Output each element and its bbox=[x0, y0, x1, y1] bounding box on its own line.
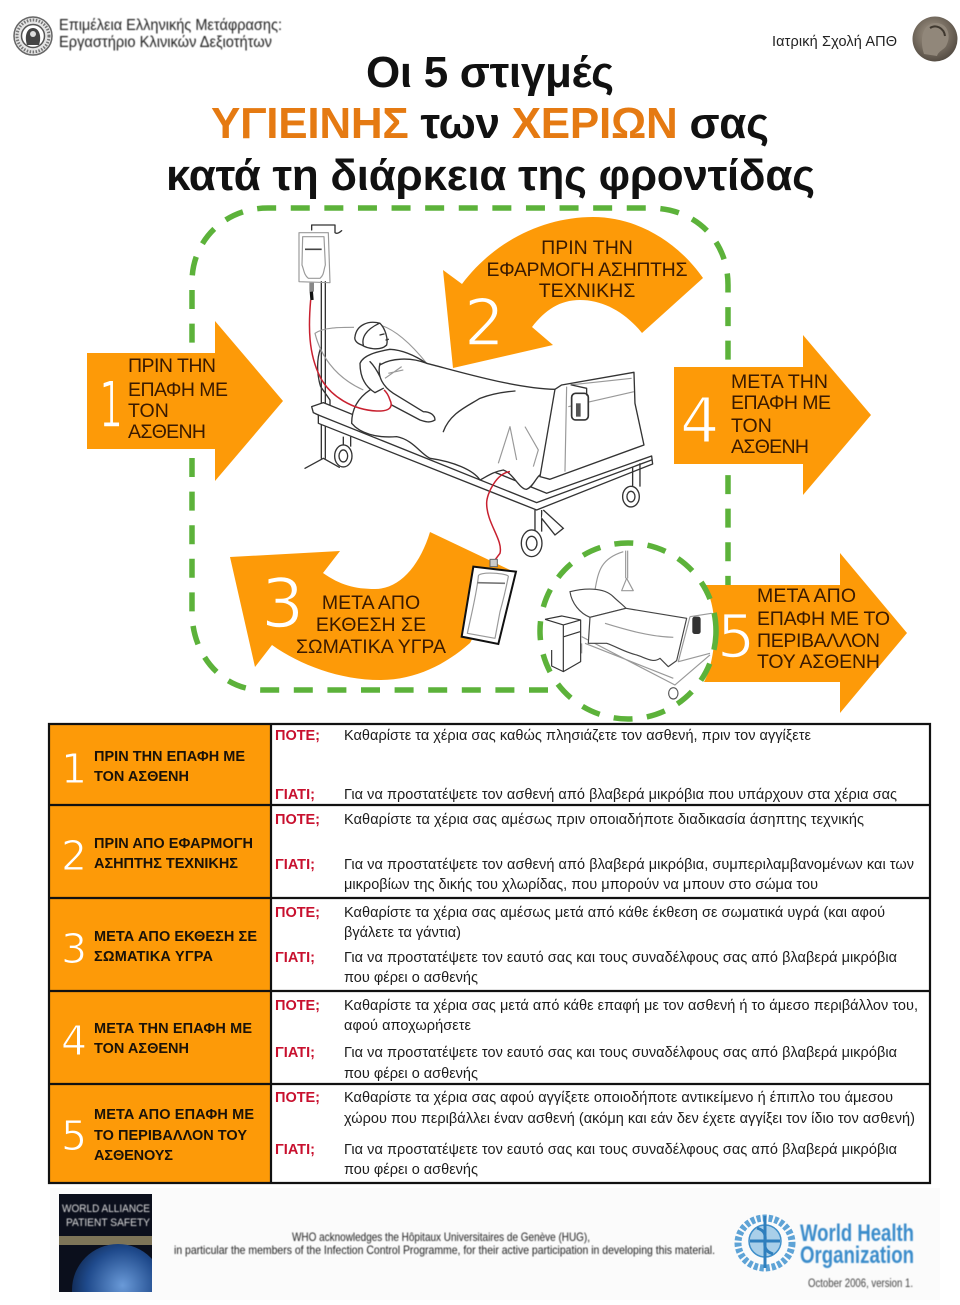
row 5: Καθαρίστε τα χέρια σας αφού αγγίξετε οποιοδήποτε αντικείμενο ή έπιπλο του άμεσου bbox=[344, 1090, 893, 1106]
row 2: Καθαρίστε τα χέρια σας αμέσως πριν οποιαδήποτε διαδικασία άσηπτης τεχνικής bbox=[344, 812, 864, 828]
row 3: ΜΕΤΑ ΑΠΟ ΕΚΘΕΣΗ ΣΕ bbox=[94, 929, 257, 945]
book cover: World Alliance for Patient Safety: PATIENT SAFETY bbox=[66, 1217, 151, 1229]
foot board bbox=[540, 372, 644, 479]
bed sheet bbox=[352, 363, 555, 489]
row 5: ΑΣΘΕΝΟΥΣ bbox=[94, 1148, 173, 1164]
row 1: ΠΡΙΝ ΤΗΝ ΕΠΑΦΗ ΜΕ bbox=[94, 749, 245, 765]
acknowledgement: WHO acknowledges the Hôpitaux Universitaires de Genève (HUG), bbox=[292, 1230, 590, 1244]
row 5: 5 bbox=[61, 1112, 87, 1160]
pillow bbox=[315, 325, 427, 390]
gel dispenser bbox=[572, 385, 588, 420]
mattress and sheet bbox=[588, 608, 687, 667]
arrow 4: ΤΟΝ bbox=[731, 415, 772, 437]
arrow 3: ΜΕΤΑ ΑΠΟ bbox=[322, 592, 420, 614]
row 5: που φέρει ο ασθενής bbox=[344, 1162, 478, 1178]
header: translation credit bbox=[14, 17, 282, 55]
row 5: ΤΟ ΠΕΡΙΒΑΛΛΟΝ ΤΟΥ bbox=[94, 1128, 247, 1144]
sheet folds bbox=[385, 367, 538, 467]
title: ΥΓΙΕΙΝΗΣ των ΧΕΡΙΩΝ σας bbox=[211, 99, 769, 148]
icon: university seal bbox=[14, 17, 52, 55]
table lines bbox=[49, 724, 930, 1183]
row 4: αφού αποχωρήσετε bbox=[344, 1018, 472, 1034]
title: κατά τη διάρκεια της φροντίδας bbox=[166, 151, 815, 200]
row 1: 1 bbox=[61, 745, 87, 793]
row 4 bbox=[61, 998, 918, 1082]
WHO wordmark: World Health bbox=[800, 1220, 914, 1247]
dashed green patient zone bbox=[192, 208, 728, 690]
book cover: World Alliance for Patient Safety: WORLD ALLIANCE bbox=[62, 1203, 150, 1215]
arrow 5: ΤΟΥ ΑΣΘΕΝΗ bbox=[757, 651, 880, 673]
dashed circle: patient surroundings bbox=[540, 543, 716, 719]
row 3: 3 bbox=[61, 925, 87, 973]
row 4: ΜΕΤΑ ΤΗΝ ΕΠΑΦΗ ΜΕ bbox=[94, 1021, 252, 1037]
foot board details bbox=[565, 378, 634, 472]
footer backdrop bbox=[50, 1188, 940, 1300]
IV bag bbox=[299, 233, 330, 300]
credit text bbox=[59, 17, 282, 51]
row 2: Για να προστατέψετε τον ασθενή από βλαβερά μικρόβια, συμπεριλαμβανομένων και των bbox=[344, 857, 914, 873]
row label backgrounds bbox=[49, 724, 271, 1183]
WHO wordmark: Organization bbox=[800, 1242, 914, 1269]
arrow 5: ΠΕΡΙΒΑΛΛΟΝ bbox=[757, 630, 880, 652]
arrow 1: ΠΡΙΝ ΤΗΝ bbox=[128, 355, 216, 377]
arrow 3 bbox=[230, 532, 510, 680]
row 2: ΠΡΙΝ ΑΠΟ ΕΦΑΡΜΟΓΗ bbox=[94, 836, 253, 852]
row 4: που φέρει ο ασθενής bbox=[344, 1066, 478, 1082]
row 4: Καθαρίστε τα χέρια σας μετά από κάθε επαφή με τον ασθενή ή το άμεσο περιβάλλον του, bbox=[344, 998, 918, 1014]
illustration: urine bag bbox=[462, 559, 516, 644]
row 4: Για να προστατέψετε τον εαυτό σας και τους συναδέλφους σας από βλαβερά μικρόβια bbox=[344, 1045, 897, 1061]
illustration: patient in bed with IV drip bbox=[299, 225, 653, 560]
patient body and arm bbox=[360, 349, 435, 422]
credit text: Εργαστήριο Κλινικών Δεξιοτήτων bbox=[59, 34, 272, 51]
arrow 3: ΣΩΜΑΤΙΚΑ ΥΓΡΑ bbox=[296, 636, 446, 658]
row 2 bbox=[61, 812, 914, 893]
drip stand and backrest bbox=[595, 551, 633, 591]
bed frame bbox=[312, 403, 653, 510]
bed frame rail bbox=[318, 415, 652, 503]
row 1 bbox=[61, 728, 897, 803]
version note: October 2006, version 1. bbox=[808, 1278, 913, 1290]
row 1: Για να προστατέψετε τον ασθενή από βλαβερά μικρόβια που υπάρχουν στα χέρια σας bbox=[344, 787, 897, 803]
row 5: Για να προστατέψετε τον εαυτό σας και τους συναδέλφους σας από βλαβερά μικρόβια bbox=[344, 1142, 897, 1158]
bed sheet outline bbox=[352, 363, 555, 489]
footer bbox=[59, 1194, 914, 1292]
arrow 2: ΠΡΙΝ ΤΗΝ bbox=[541, 237, 633, 259]
arrow 2 bbox=[443, 217, 703, 368]
header: medical school bbox=[772, 16, 958, 62]
arrow 3: ΕΚΘΕΣΗ ΣΕ bbox=[316, 614, 426, 636]
row 1: ΤΟΝ ΑΣΘΕΝΗ bbox=[94, 769, 189, 785]
arrow 1: 1 bbox=[99, 369, 123, 443]
arrow 5: ΜΕΤΑ ΑΠΟ bbox=[757, 585, 856, 607]
pillow bbox=[570, 589, 626, 617]
row 5: ΓΙΑΤΙ; bbox=[275, 1142, 315, 1158]
book cover: World Alliance for Patient Safety bbox=[59, 1194, 152, 1292]
title: Οι 5 στιγμές bbox=[366, 48, 614, 97]
table bbox=[49, 724, 930, 1183]
patient hair and face bbox=[363, 323, 388, 345]
IV pole bbox=[305, 225, 342, 468]
arrow 4: ΜΕΤΑ ΤΗΝ bbox=[731, 371, 828, 393]
credit text: Επιμέλεια Ελληνικής Μετάφρασης: bbox=[59, 17, 282, 34]
row 1: ΓΙΑΤΙ; bbox=[275, 787, 315, 803]
frame and foot board bbox=[582, 613, 712, 685]
row 4: ΤΟΝ ΑΣΘΕΝΗ bbox=[94, 1041, 189, 1057]
school name: Ιατρική Σχολή ΑΠΘ bbox=[772, 34, 897, 50]
bed head rail bbox=[318, 348, 330, 407]
acknowledgement bbox=[174, 1230, 715, 1257]
arrow 1: ΤΟΝ bbox=[128, 400, 169, 422]
arrow 4 bbox=[674, 335, 871, 495]
arrow 5: ΕΠΑΦΗ ΜΕ ΤΟ bbox=[757, 608, 890, 630]
WHO wordmark bbox=[800, 1220, 914, 1269]
row 3 bbox=[61, 905, 897, 986]
title bbox=[166, 48, 815, 200]
row 5: ΜΕΤΑ ΑΠΟ ΕΠΑΦΗ ΜΕ bbox=[94, 1107, 254, 1123]
row 3: ΠΟΤΕ; bbox=[275, 905, 320, 921]
row 3: ΓΙΑΤΙ; bbox=[275, 950, 315, 966]
arrow 2: 2 bbox=[464, 287, 505, 361]
arrow 2: ΕΦΑΡΜΟΓΗ ΑΣΗΠΤΗΣ bbox=[486, 259, 688, 281]
row 3: που φέρει ο ασθενής bbox=[344, 970, 478, 986]
acknowledgement: in particular the members of the Infection Control Programme, for their active participation in developing this material. bbox=[174, 1243, 715, 1257]
bed wheels bbox=[335, 437, 640, 557]
row 2: μικροβίων της δικής του χλωρίδας, που μπορούν να μπουν στο σώμα του bbox=[344, 877, 818, 893]
row 3: Για να προστατέψετε τον εαυτό σας και τους συναδέλφους σας από βλαβερά μικρόβια bbox=[344, 950, 897, 966]
arrow 3: 3 bbox=[261, 565, 304, 644]
red tubes bbox=[309, 300, 510, 560]
row 4: 4 bbox=[61, 1017, 87, 1065]
bedside cabinet bbox=[545, 616, 581, 672]
arrow 5 bbox=[704, 553, 907, 713]
icon: medal bbox=[912, 16, 958, 62]
row 3: βγάλετε τα γάντια) bbox=[344, 925, 461, 941]
row 5 bbox=[61, 1090, 915, 1178]
arrow 2: ΤΕΧΝΙΚΗΣ bbox=[539, 280, 635, 302]
row 2: ΑΣΗΠΤΗΣ ΤΕΧΝΙΚΗΣ bbox=[94, 856, 238, 872]
illustration: empty bed and bedside table bbox=[545, 551, 712, 699]
arrow 1 bbox=[87, 321, 283, 481]
arrow 1: ΑΣΘΕΝΗ bbox=[128, 421, 206, 443]
arrow 4: 4 bbox=[680, 384, 719, 457]
row 5: χώρου που περιβάλλει έναν ασθενή (ακόμη και εάν δεν έχετε αγγίξει τον ίδιο τον ασθενή) bbox=[344, 1111, 915, 1127]
gel dispenser bbox=[692, 617, 701, 634]
row 3: ΣΩΜΑΤΙΚΑ ΥΓΡΑ bbox=[94, 949, 214, 965]
row 4: ΠΟΤΕ; bbox=[275, 998, 320, 1014]
row 1: ΠΟΤΕ; bbox=[275, 728, 320, 744]
arrow 1: ΕΠΑΦΗ ΜΕ bbox=[128, 379, 228, 401]
row 3: Καθαρίστε τα χέρια σας αμέσως μετά από κάθε έκθεση σε σωματικά υγρά (και αφού bbox=[344, 905, 885, 921]
patient head bbox=[355, 322, 387, 349]
wheel bbox=[669, 688, 678, 699]
arrow 4: ΑΣΘΕΝΗ bbox=[731, 436, 809, 458]
row 4: ΓΙΑΤΙ; bbox=[275, 1045, 315, 1061]
row 2: ΓΙΑΤΙ; bbox=[275, 857, 315, 873]
arrow 4: ΕΠΑΦΗ ΜΕ bbox=[731, 392, 831, 414]
row 2: ΠΟΤΕ; bbox=[275, 812, 320, 828]
arrow 5: 5 bbox=[717, 602, 755, 672]
row 1: Καθαρίστε τα χέρια σας καθώς πλησιάζετε τον ασθενή, πριν τον αγγίξετε bbox=[344, 728, 812, 744]
WHO emblem bbox=[738, 1216, 792, 1268]
row 5: ΠΟΤΕ; bbox=[275, 1090, 320, 1106]
sheet fold bbox=[605, 623, 673, 637]
row 2: 2 bbox=[61, 832, 87, 880]
